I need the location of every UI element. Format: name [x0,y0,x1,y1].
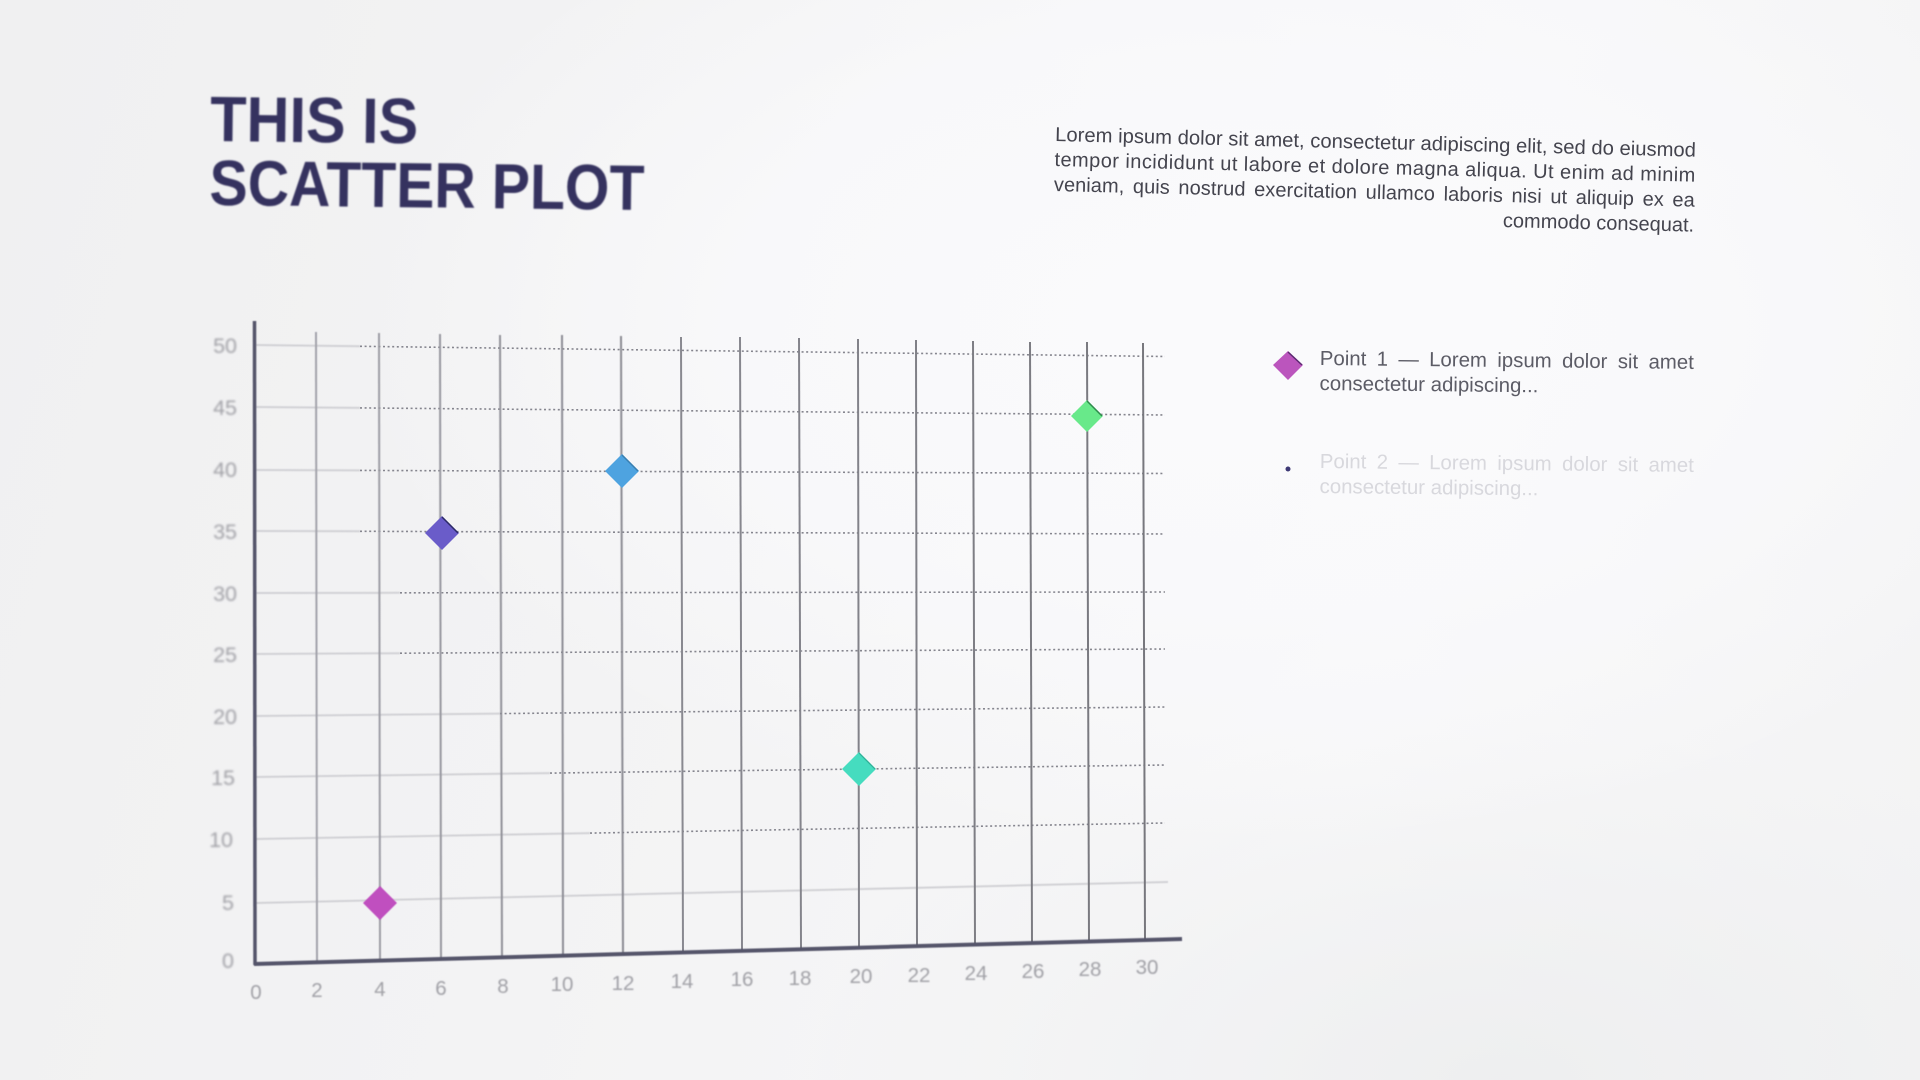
x axis labels: 22 [908,964,930,987]
paragraph text block: tempor incididunt ut labore et dolore magna aliqua. Ut enim ad minim [1054,149,1696,187]
y axis labels: 35 [213,520,237,544]
x axis labels: 2 [311,979,323,1002]
y axis labels [209,334,237,973]
x axis labels: 14 [671,970,693,993]
title: THIS IS [210,83,419,157]
data point: pink (4, 5) [363,886,397,920]
legend icon: pink diamond [1273,351,1303,380]
legend text: point 1: Point 1 — Lorem ipsum dolor sit amet [1320,348,1694,374]
legend text: point 2: consectetur adipiscing... [1319,476,1538,500]
y axis labels: 20 [213,705,237,729]
vertical grid lines [316,332,1145,962]
x axis labels: 4 [374,978,386,1001]
x axis labels: 6 [435,977,447,1000]
y axis labels: 30 [213,582,237,606]
paragraph text block: veniam, quis nostrud exercitation ullamco laboris nisi ut aliquip ex ea [1054,174,1696,212]
x axis labels: 28 [1079,958,1101,981]
x axis labels: 18 [789,967,811,990]
title: SCATTER PLOT [209,147,645,224]
y axis labels: 10 [209,828,233,852]
y axis labels: 40 [213,458,237,482]
axes [254,321,1182,965]
y axis labels: 45 [213,396,237,420]
paragraph text block: Lorem ipsum dolor sit amet, consectetur adipiscing elit, sed do eiusmod [1055,124,1696,162]
x axis labels: 12 [612,972,634,995]
x axis labels: 20 [850,965,872,988]
y axis labels: 0 [222,949,234,973]
legend text: point 2: Point 2 — Lorem ipsum dolor sit amet [1320,451,1694,477]
x axis labels: 30 [1136,956,1158,979]
x axis labels [250,956,1158,1004]
legend text: point 1: consectetur adipiscing... [1319,373,1538,397]
y axis labels: 15 [211,766,235,790]
x axis labels: 0 [250,981,262,1004]
y axis labels: 5 [222,891,234,915]
x axis labels: 8 [497,975,509,998]
scatter plot chart [209,321,1182,1004]
x axis labels: 26 [1022,960,1044,983]
x axis labels: 24 [965,962,987,985]
paragraph text block: commodo consequat. [1503,210,1694,237]
y axis labels: 25 [213,643,237,667]
data point: green (28, 45) [1071,400,1103,432]
data point: blue (12, 40) [605,454,639,488]
horizontal grid lines [256,345,1168,903]
y axis labels: 50 [213,334,237,358]
title [209,83,646,224]
legend text: point 1 [1319,348,1694,397]
legend text: point 2 [1319,451,1694,500]
paragraph text block [1053,124,1697,237]
legend icon: small dot [1286,466,1290,472]
data point: teal (20, 15) [842,752,876,786]
data point: purple (6, 35) [425,516,459,550]
x axis labels: 10 [551,973,573,996]
x axis labels: 16 [731,968,753,991]
